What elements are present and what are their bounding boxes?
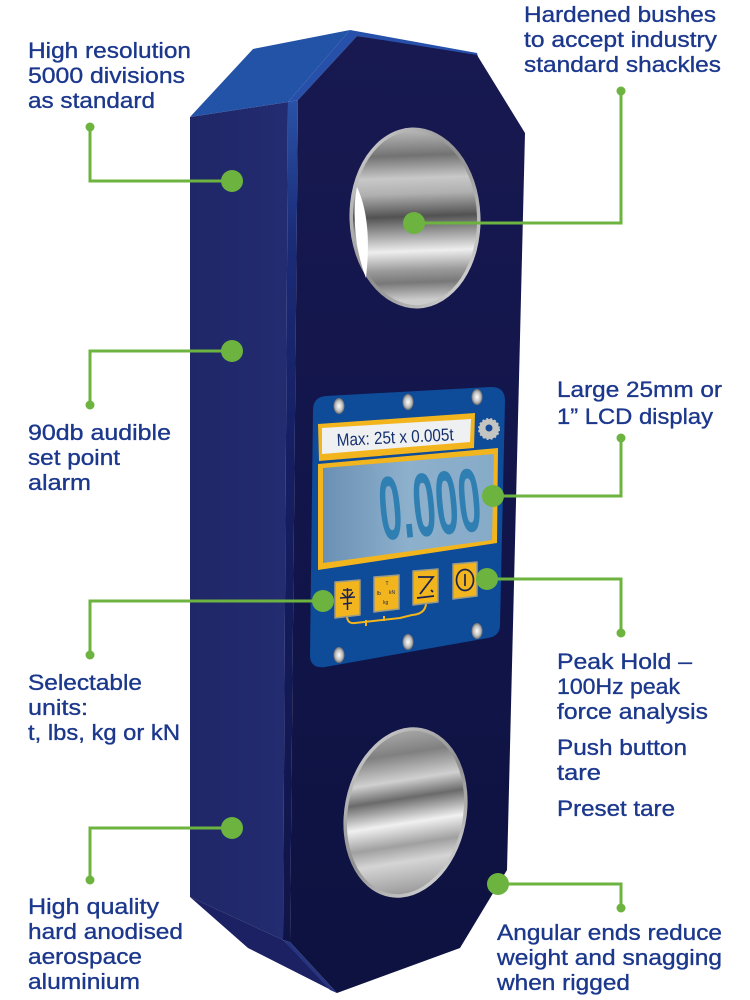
text: peak hold and tare (557, 649, 708, 821)
callout dots (86, 86, 626, 912)
bottom edge highlight (283, 940, 337, 993)
capacity label (318, 413, 475, 461)
connector: anodised aluminium (90, 828, 232, 880)
connector: peak hold (487, 579, 621, 633)
connector: hardened bushes (414, 91, 621, 223)
bottom chamfer (190, 897, 337, 993)
hole rim (346, 125, 484, 311)
text: high resolution: High resolution (28, 38, 191, 63)
text: audible alarm: set point (28, 445, 120, 470)
text: angular ends: weight and snagging (496, 945, 722, 970)
text: anodised aluminium: aluminium (28, 969, 140, 994)
units button (374, 575, 399, 612)
text: peak hold and tare: Preset tare (557, 796, 675, 821)
text: high resolution: 5000 divisions (28, 63, 185, 88)
button wiring (347, 604, 426, 626)
text: anodised aluminium: hard anodised (28, 919, 183, 944)
text: selectable units: Selectable (28, 670, 142, 695)
corner strip (283, 100, 298, 942)
text: angular ends: Angular ends reduce (497, 920, 722, 945)
text: hardened bushes (524, 2, 721, 77)
text: anodised aluminium: aerospace (28, 944, 142, 969)
callout connectors (90, 91, 621, 908)
upper shackle hole (346, 125, 484, 311)
peak button (335, 580, 360, 618)
units button: kN (389, 590, 396, 596)
text: peak hold and tare: force analysis (557, 699, 708, 724)
connector: LCD display (493, 438, 621, 496)
text: peak hold and tare: 100Hz peak (557, 674, 681, 699)
connector: audible alarm (90, 351, 232, 405)
front face (290, 36, 525, 993)
connector: angular ends (498, 884, 621, 908)
text: angular ends: when rigged (496, 970, 630, 995)
display panel (310, 387, 505, 667)
text: selectable units: t, lbs, kg or kN (28, 720, 180, 745)
text: audible alarm: alarm (28, 470, 91, 495)
side face (190, 102, 288, 940)
text: LCD display (557, 377, 722, 429)
hole steel bush (333, 721, 478, 904)
text: anodised aluminium (28, 894, 183, 994)
text: anodised aluminium: High quality (28, 894, 159, 919)
connector: selectable units (90, 601, 323, 655)
tare button (413, 569, 438, 605)
power button (453, 562, 477, 599)
text: selectable units: units: (28, 695, 88, 720)
capacity label: Max: 25t x 0.005t (336, 424, 454, 450)
units button: lb (377, 591, 381, 597)
LCD display (318, 448, 498, 570)
hole steel bush (350, 129, 480, 307)
text: hardened bushes: standard shackles (524, 52, 721, 77)
text: high resolution: as standard (28, 88, 155, 113)
text: high resolution (28, 38, 191, 113)
hole rim (329, 716, 482, 909)
text: peak hold and tare: tare (557, 760, 601, 785)
text: hardened bushes: Hardened bushes (524, 2, 716, 27)
panel screws (334, 389, 482, 663)
lower shackle hole (329, 716, 482, 909)
text: LCD display: Large 25mm or (557, 377, 722, 402)
text: audible alarm (28, 420, 171, 495)
text: angular ends (496, 920, 722, 995)
load link body (190, 30, 525, 993)
units button: kg (383, 600, 388, 606)
panel plate (310, 387, 505, 667)
text: audible alarm: 90db audible (28, 420, 171, 445)
top edge highlight (288, 30, 478, 102)
text: selectable units (28, 670, 180, 745)
connector: high resolution (90, 127, 232, 181)
text: LCD display: 1” LCD display (557, 404, 713, 429)
text: peak hold and tare: Peak Hold – (557, 649, 693, 674)
text: peak hold and tare: Push button (557, 735, 687, 760)
bush inner highlight (355, 187, 368, 278)
top chamfer (190, 30, 350, 117)
LCD display: 0.000 (374, 451, 485, 560)
units button: T (385, 581, 389, 587)
text: hardened bushes: to accept industry (524, 27, 717, 52)
gear logo (479, 419, 499, 439)
